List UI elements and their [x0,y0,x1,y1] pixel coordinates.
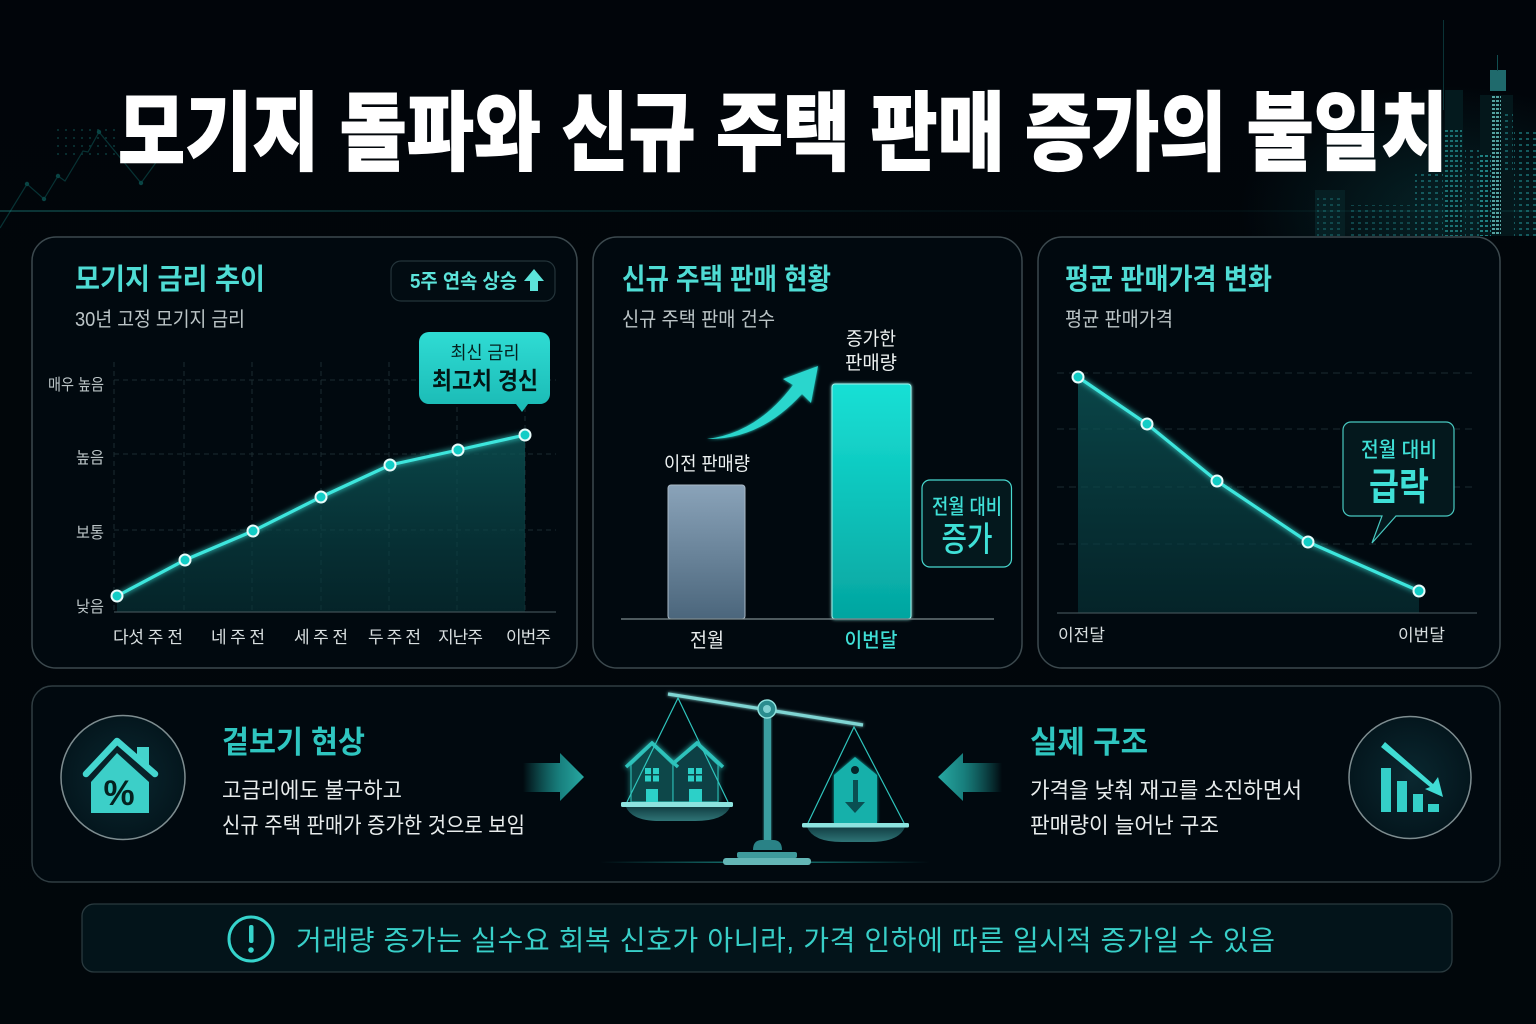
panel: new home sales [593,237,1022,668]
y-axis labels [48,376,104,616]
y-axis labels: 높음 [76,449,104,467]
callout: up versus last month [922,480,1012,567]
x-axis labels [113,628,551,647]
icon: balance scale [600,694,930,865]
text: apparent phenomenon description: 신규 주택 판매가 증가한 것으로 보임 [222,813,525,838]
text: apparent phenomenon description: 고금리에도 불구하고 [222,778,402,803]
text: actual structure description: 판매량이 늘어난 구조 [1030,813,1219,838]
x-axis labels: 이번주 [506,628,551,647]
label: this month: 이번달 [1398,626,1445,645]
heading: actual structure: 실제 구조 [1030,725,1148,760]
subtitle: 30-year fixed: 30년 고정 모기지 금리 [75,308,245,331]
right pan with price tag [802,727,909,842]
label: previous sales: 이전 판매량 [664,453,750,475]
background: faint rising line chart [0,124,160,228]
heading: mortgage rate trend: 모기지 금리 추이 [75,263,265,296]
callout: latest rate record high: 최신 금리 [450,343,520,363]
label: increased sales: 증가한 [846,328,896,350]
y-axis labels: 매우 높음 [48,376,104,394]
label: this month: 이번달 [844,629,898,652]
text: key takeaway: 거래량 증가는 실수요 회복 신호가 아니라, 가격 인하에 따른 일시적 증가일 수 있음 [296,925,1275,956]
arrow: pointing left to scale [938,753,1002,801]
x-axis labels: 다섯 주 전 [113,628,183,647]
text: actual structure description: 가격을 낮춰 재고를 소진하면서 [1030,778,1302,803]
arrow: rising sales [707,366,818,439]
callout: latest rate record high [419,332,550,412]
y-axis labels: 보통 [76,524,104,542]
text: actual structure description [1030,778,1302,838]
callout: latest rate record high: 최고치 경신 [432,368,538,395]
x-axis labels: 세 주 전 [294,628,348,647]
icon: exclamation [229,917,273,961]
background: horizon glow line [0,210,1536,212]
y-axis labels: 낮음 [76,598,104,616]
icon: house with percent: % [103,774,135,813]
bar: this month [832,384,911,619]
subtitle: number of sales: 신규 주택 판매 건수 [622,308,775,331]
line chart: mortgage rate [112,362,556,612]
left pan with two houses [621,698,733,821]
scale beam [668,694,863,725]
callout: up versus last month: 전월 대비 [932,496,1002,519]
icon: falling bars with arrow [1349,716,1471,838]
label: last month: 전월 [690,629,724,652]
panel: mortgage rate trend [32,237,577,668]
callout: sharp drop [1343,422,1454,543]
text: apparent phenomenon description [222,778,525,838]
axis baseline [621,618,994,620]
panel: apparent vs actual structure [32,686,1500,882]
line chart: falling price [1057,372,1477,613]
label: increased sales: 판매량 [845,352,897,374]
background: city skyline [1240,20,1536,236]
x-axis labels: 두 주 전 [368,628,421,647]
heading: average price change: 평균 판매가격 변화 [1065,263,1272,296]
x-axis labels: 네 주 전 [211,628,265,647]
callout: sharp drop: 급락 [1369,467,1429,509]
footer callout [82,904,1452,972]
arrow: pointing right to scale [523,753,584,801]
callout: up versus last month: 증가 [942,521,992,559]
callout: sharp drop: 전월 대비 [1361,439,1437,462]
badge: five-week rise: 5주 연속 상승 [410,270,517,293]
heading: apparent phenomenon: 겉보기 현상 [222,725,365,760]
heading: new home sales status: 신규 주택 판매 현황 [622,263,831,296]
x-axis labels: 지난주 [438,628,483,647]
label: increased sales [845,328,897,374]
badge: five-week rise [391,261,555,301]
panel: average sale price [1038,237,1500,668]
subtitle: average sale price: 평균 판매가격 [1065,308,1173,331]
icon: house with percent [61,716,185,840]
scale post and base [723,712,811,865]
bar: previous month [668,485,745,619]
label: previous month: 이전달 [1058,626,1105,645]
